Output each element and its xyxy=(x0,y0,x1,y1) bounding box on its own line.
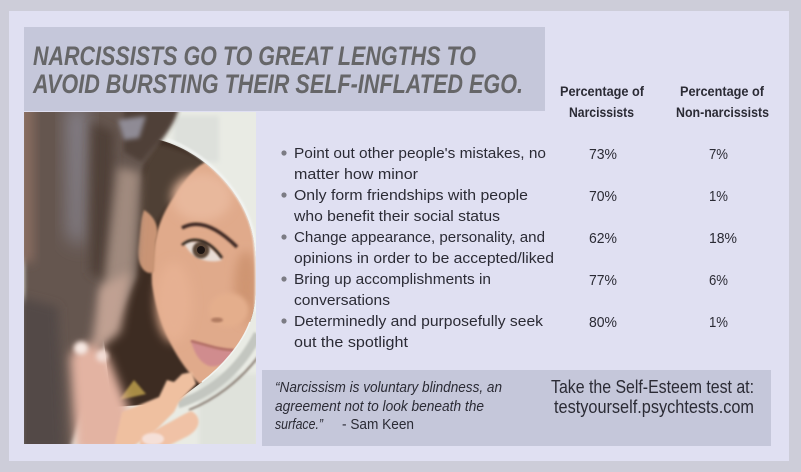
row 3: Change appearance, personality, and xyxy=(294,229,545,246)
quote: agreement not to look beneath the xyxy=(275,399,484,415)
column headers: Narcissists xyxy=(569,105,634,120)
footer band xyxy=(262,370,771,446)
quote: “Narcissism is voluntary blindness, an xyxy=(275,380,502,396)
row 2: 70% xyxy=(589,188,617,205)
eyebrow xyxy=(182,224,237,247)
ear xyxy=(138,210,158,273)
row 5 xyxy=(281,313,728,351)
row 4: 77% xyxy=(589,272,617,289)
mirror contents xyxy=(104,140,256,406)
row 3: opinions in order to be accepted/liked xyxy=(294,250,554,267)
foreground hair xyxy=(18,102,179,452)
row 3 xyxy=(281,229,737,267)
row 5: out the spotlight xyxy=(294,334,409,351)
lips xyxy=(191,341,234,366)
row 1 xyxy=(281,145,728,183)
row 3: 62% xyxy=(589,230,617,247)
collar xyxy=(119,380,146,400)
row 3: 18% xyxy=(709,230,737,247)
row 2: Only form friendships with people xyxy=(294,187,528,204)
foreground hand xyxy=(70,342,199,452)
title banner xyxy=(24,27,545,111)
row 2 xyxy=(281,187,728,225)
column headers xyxy=(560,84,769,120)
row 1: 73% xyxy=(589,146,617,163)
eye xyxy=(184,241,222,261)
column headers: Percentage of xyxy=(680,84,764,99)
quote: - Sam Keen xyxy=(342,417,414,433)
mirror rim xyxy=(166,139,256,312)
call to action: Take the Self-Esteem test at: xyxy=(551,377,754,397)
call to action xyxy=(551,377,754,417)
quote: surface.” xyxy=(275,417,324,433)
call to action: testyourself.psychtests.com xyxy=(554,397,754,417)
row 1: 7% xyxy=(709,146,728,163)
row 2: who benefit their social status xyxy=(293,208,500,225)
column headers: Non-narcissists xyxy=(676,105,769,120)
row 1: Point out other people's mistakes, no xyxy=(294,145,546,162)
row 4: Bring up accomplishments in xyxy=(294,271,491,288)
photo: woman looking in a hand mirror xyxy=(24,112,256,444)
row 4 xyxy=(281,271,728,309)
quote xyxy=(275,380,502,433)
row 2: 1% xyxy=(709,188,728,205)
title banner: AVOID BURSTING THEIR SELF-INFLATED EGO. xyxy=(32,69,523,99)
row 5: 1% xyxy=(709,314,728,331)
row 4: 6% xyxy=(709,272,728,289)
behaviour list xyxy=(281,145,737,351)
row 5: Determinedly and purposefully seek xyxy=(294,313,544,330)
row 5: 80% xyxy=(589,314,617,331)
row 1: matter how minor xyxy=(294,166,418,183)
column headers: Percentage of xyxy=(560,84,644,99)
title banner: NARCISSISTS GO TO GREAT LENGTHS TO xyxy=(33,41,476,71)
row 4: conversations xyxy=(294,292,390,309)
